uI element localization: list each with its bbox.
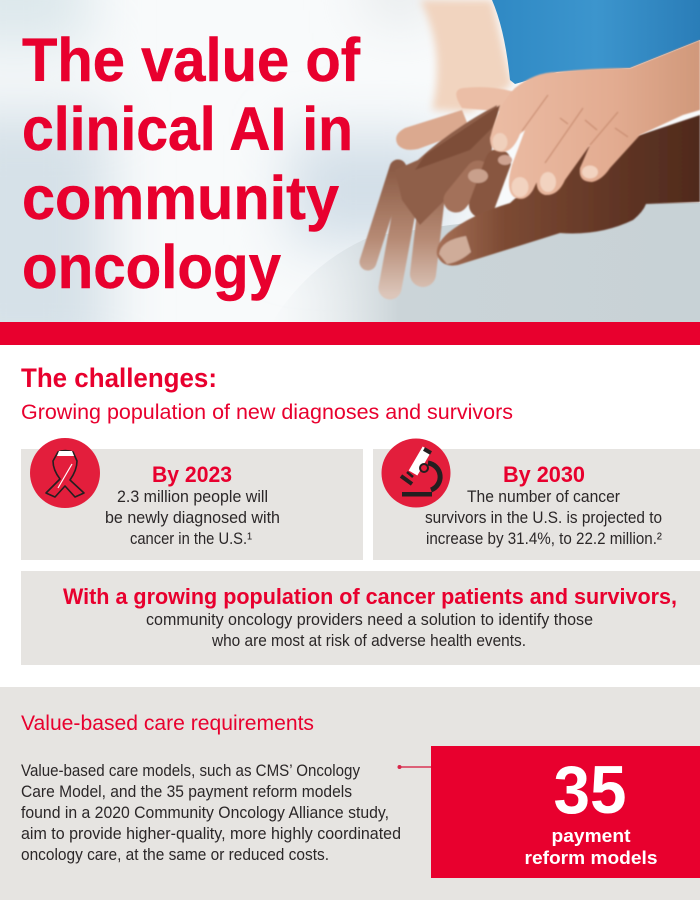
- heading: by 2030: By 2030: [503, 462, 585, 487]
- stat label: [524, 826, 658, 868]
- text: diagnoses: be newly diagnosed with: [105, 509, 280, 527]
- heading: value-based care: Value-based care requirements: [21, 711, 314, 735]
- pale fingers behind: [456, 87, 515, 112]
- thumbnail: [439, 236, 471, 264]
- stat number: 35: [554, 752, 626, 828]
- text: diagnoses: [105, 488, 280, 548]
- title: [22, 26, 361, 301]
- body text: oncology care, at the same or reduced costs.: [21, 846, 329, 864]
- panel: growing population callout: [21, 571, 700, 665]
- patient hand: [368, 87, 700, 288]
- hero photo: caring hands: [0, 0, 700, 322]
- callout text: who are most at risk of adverse health events.: [211, 632, 526, 650]
- heading: the challenges: The challenges:: [21, 363, 217, 393]
- title: clinical AI in: [22, 95, 353, 163]
- text: survivors: survivors in the U.S. is projected to: [425, 509, 662, 527]
- body text: found in a 2020 Community Oncology Alliance study,: [21, 804, 389, 822]
- callout text: community oncology providers need a solution to identify those: [146, 611, 593, 629]
- stat label: reform models: [524, 848, 658, 868]
- nurse hand: [490, 40, 700, 199]
- body text: Care Model, and the 35 payment reform models: [21, 783, 352, 801]
- panel: value-based care: [0, 687, 700, 900]
- text: diagnoses: cancer in the U.S.¹: [130, 530, 252, 548]
- callout heading: With a growing population of cancer patients and survivors,: [63, 584, 677, 609]
- bed sheet: [272, 203, 700, 322]
- text: survivors: [425, 488, 662, 548]
- stat box: 35: [431, 746, 700, 878]
- subheading: Growing population of new diagnoses and survivors: [21, 401, 513, 424]
- title: community: [22, 164, 339, 232]
- body text: [21, 762, 401, 864]
- red band: [0, 322, 700, 345]
- stat label: payment: [552, 826, 630, 846]
- blue shirt: [492, 0, 700, 84]
- title: The value of: [22, 26, 361, 94]
- text: survivors: increase by 31.4%, to 22.2 million.²: [426, 530, 662, 548]
- panel: by 2030: [373, 438, 700, 560]
- text: diagnoses: 2.3 million people will: [117, 488, 268, 506]
- text: survivors: The number of cancer: [467, 488, 620, 506]
- title: oncology: [22, 233, 281, 301]
- body text: aim to provide higher-quality, more highly coordinated: [21, 825, 401, 843]
- icon: awareness ribbon: [30, 438, 100, 508]
- icon: microscope: [382, 438, 450, 508]
- body text: Value-based care models, such as CMS’ Oncology: [21, 762, 361, 780]
- panel: by 2023: [21, 438, 363, 560]
- heading: by 2023: By 2023: [152, 462, 232, 487]
- callout text: [146, 611, 593, 650]
- blurred forearm: [420, 0, 512, 112]
- connector line: [398, 765, 432, 769]
